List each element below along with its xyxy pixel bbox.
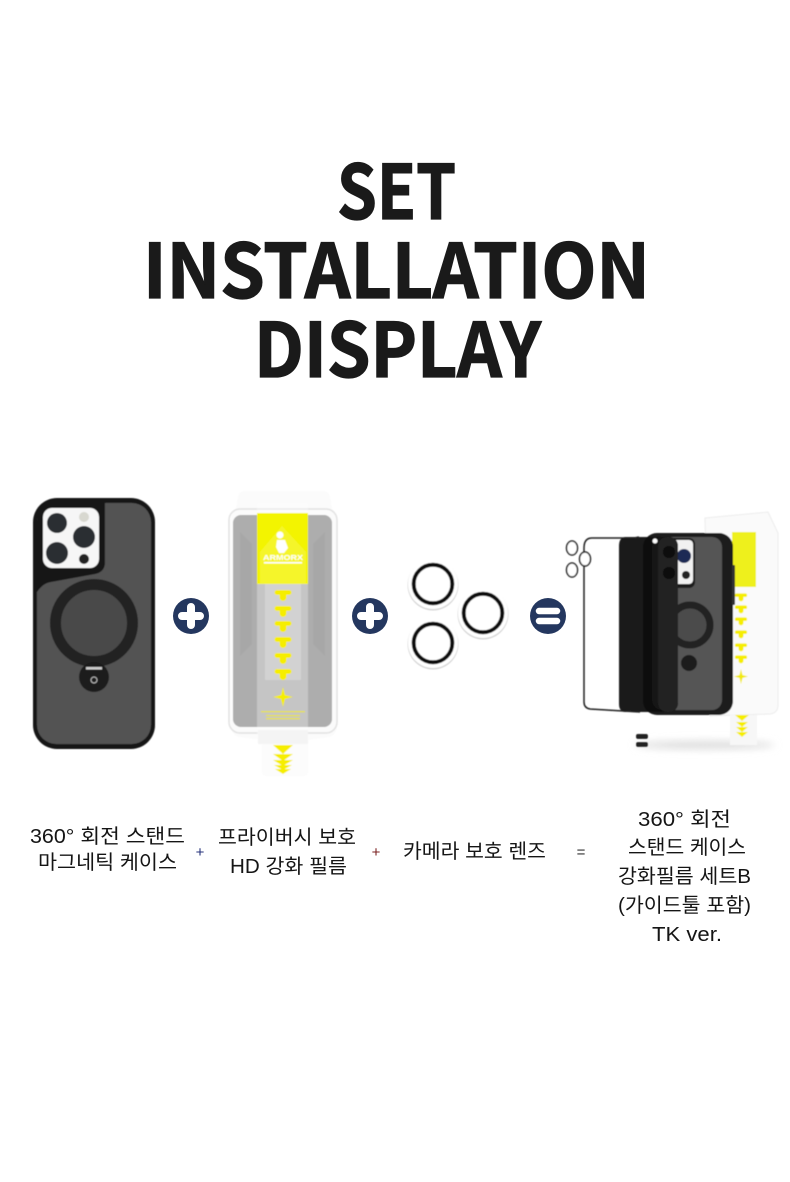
product: privacy tempered film with guide tool: ARMORX [263,555,303,562]
plus sign 2: + [372,844,381,861]
label: privacy film: 프라이버시 보호 [218,826,356,849]
label: full set: 스탠드 케이스 [628,836,746,859]
label: privacy film: HD 강화 필름 [230,855,347,878]
label: full set: 360° 회전 [638,808,731,831]
product: assembled set [566,512,778,749]
plus sign 1: + [196,844,205,861]
equals icon [530,598,566,634]
title: DISPLAY [254,290,542,399]
title [143,132,650,399]
label: magnetic case: 360° 회전 스탠드 [30,825,185,848]
label: camera lens: 카메라 보호 렌즈 [403,840,546,863]
label: privacy film [218,826,356,878]
product: privacy tempered film with guide tool [229,491,337,780]
equals sign: = [577,844,586,861]
product: camera protection lenses [408,559,508,670]
label: full set: TK ver. [652,924,722,946]
title: INSTALLATION [143,211,650,320]
title: SET [337,132,456,241]
label: magnetic case: 마그네틱 케이스 [38,851,177,874]
label: full set: (가이드툴 포함) [618,894,751,917]
plus icon 1 [173,598,209,634]
label: magnetic case [30,825,185,874]
label: full set: 강화필름 세트B [618,865,751,888]
plus icon 2 [352,598,388,634]
label: full set [618,808,751,946]
product: magnetic stand case [33,498,155,749]
